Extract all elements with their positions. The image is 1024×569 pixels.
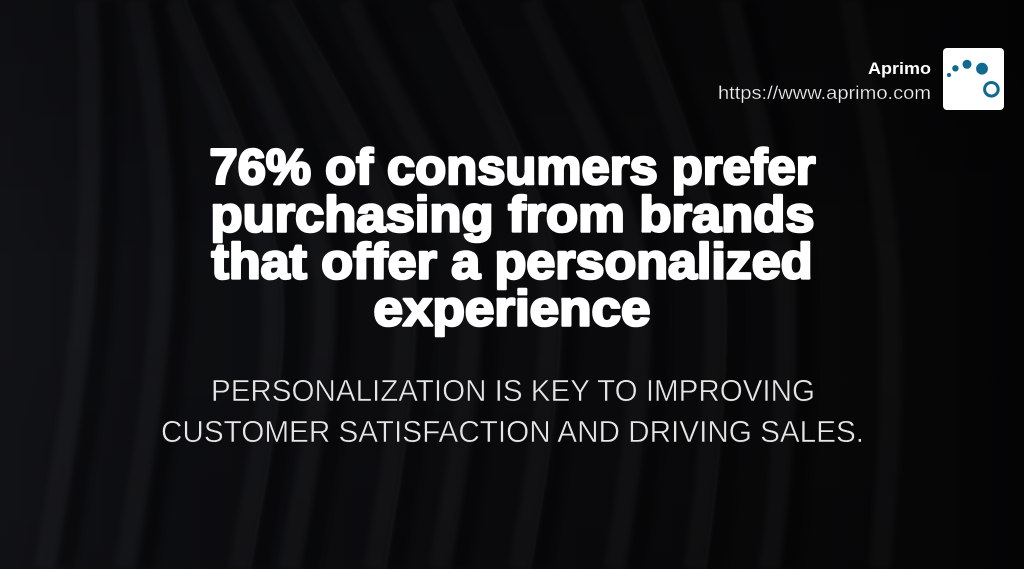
subheading: PERSONALIZATION IS KEY TO IMPROVING xyxy=(211,373,815,408)
icon: Aprimo logo xyxy=(943,48,1004,110)
subheading xyxy=(161,373,864,449)
heading: that offer a personalized xyxy=(212,234,812,290)
heading: 76% of consumers prefer xyxy=(210,139,816,195)
heading: purchasing from brands xyxy=(210,186,815,242)
subheading: CUSTOMER SATISFACTION AND DRIVING SALES. xyxy=(161,414,864,449)
heading: experience xyxy=(374,280,650,336)
brand name and URL: https://www.aprimo.com xyxy=(718,83,931,103)
brand name and URL xyxy=(718,60,931,103)
heading xyxy=(210,139,816,336)
brand name and URL: Aprimo xyxy=(868,60,931,78)
